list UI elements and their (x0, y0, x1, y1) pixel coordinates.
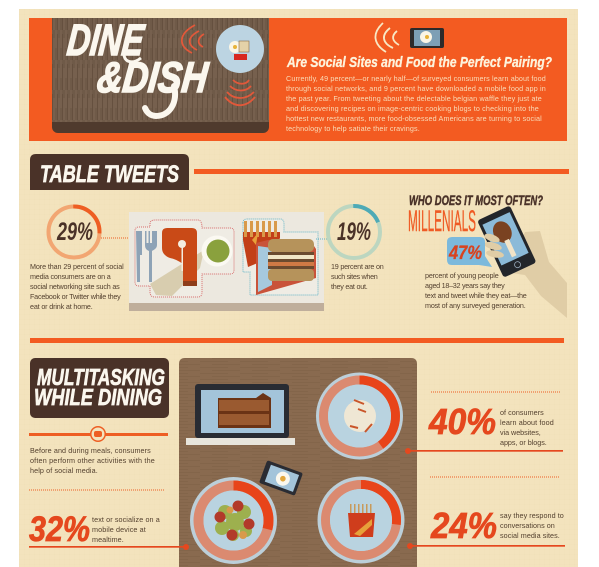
heading: Multitasking while dining: MULTITASKING (37, 364, 165, 390)
stat: 24%: social media sites. (500, 531, 560, 540)
heading: Table Tweets (30, 154, 189, 190)
stat: 32% (29, 510, 189, 550)
heading: Table Tweets: TABLE TWEETS (40, 161, 179, 188)
stat: 32%: text or socialize on a (92, 515, 160, 524)
divider with speech icon (29, 426, 168, 442)
text: before and during: Before and during meals, consumers (30, 446, 151, 455)
intro paragraph: through social networks, and 9 percent have downloaded a mobile food app in (286, 84, 546, 93)
text: 19 percent: 19 percent are on (331, 262, 384, 271)
panel: header banner (29, 16, 567, 141)
text: 19 percent (331, 262, 384, 291)
intro paragraph: and discovering recipes on image-centric cooking blogs to checking into the (286, 104, 539, 113)
phone with egg (259, 460, 303, 496)
text: young people: aged 18–32 years say they (425, 281, 505, 290)
icon: plate with egg (216, 25, 264, 73)
stat: 40%: 40% (428, 401, 496, 442)
fries (243, 221, 280, 267)
icon: phone with egg (410, 28, 444, 48)
text: young people: percent of young people (425, 271, 499, 280)
stat: 40% (405, 401, 563, 454)
text: 29 percent (30, 262, 124, 311)
title: Dine & Dish (65, 16, 211, 116)
stat: 32%: mealtime. (92, 535, 124, 544)
intro paragraph: hottest new restaurants, more food-obsessed Americans are turning to social (286, 114, 542, 123)
text: 29 percent: media consumers are on a (30, 272, 111, 281)
laptop with cake (186, 384, 295, 445)
title: Dine & Dish: &DISH (95, 54, 211, 102)
intro paragraph (286, 74, 546, 133)
stat: 24%: say they respond to (500, 511, 564, 520)
text: 29 percent: social networking site such as (30, 282, 120, 291)
panel: wooden table (179, 358, 417, 567)
heading: Multitasking while dining (30, 358, 169, 418)
salad bowl (202, 236, 232, 266)
steak (162, 228, 197, 286)
text: 19 percent: they eat out. (331, 282, 368, 291)
text: 29 percent: Facebook or Twitter while they (30, 292, 121, 301)
title: Dine & Dish: DINE (65, 16, 147, 65)
stat: 32%: mobile device at (92, 525, 146, 534)
text: 19 percent: such sites when (331, 272, 378, 281)
sandwich (256, 239, 316, 295)
stat: 40%: of consumers (500, 408, 544, 417)
intro paragraph: Currently, 49 percent—or nearly half—of surveyed consumers learn about food (286, 74, 546, 83)
stat: 29% ring: 29% (56, 218, 93, 246)
text: 29 percent: More than 29 percent of social (30, 262, 124, 271)
plate 40% (316, 372, 403, 460)
text: 29 percent: eat or drink at home. (30, 302, 93, 311)
icon: hand holding phone (477, 205, 567, 318)
knife and fork (136, 231, 157, 282)
callout bubble 47% (447, 237, 492, 267)
callout bubble 47%: 47% (448, 243, 482, 264)
stat: 40%: apps, or blogs. (500, 438, 547, 447)
text: MILLENIALS (408, 205, 476, 238)
stat: 40%: learn about food (500, 418, 554, 427)
wood sign (52, 18, 269, 133)
intro paragraph: the past year. From tweeting about the delectable belgian waffle they just ate (286, 94, 542, 103)
heading: who does it most often: WHO DOES IT MOST OFTEN? (409, 193, 543, 208)
stat: 24% (407, 505, 565, 549)
icon: signal waves red (182, 25, 255, 105)
text: young people: most of any surveyed generation. (425, 301, 526, 310)
text: young people: text and tweet while they eat—the (425, 291, 527, 300)
stat: 19% ring (328, 206, 380, 258)
stat: 19% ring: 19% (337, 218, 371, 246)
stat: 32%: 32% (29, 510, 90, 549)
intro paragraph: technology to help satiate their cravings. (286, 124, 420, 133)
text: before and during: often perform other activities with the (30, 456, 155, 465)
icon: signal waves cream (375, 23, 399, 52)
plate 24% (318, 476, 404, 564)
heading: Multitasking while dining: WHILE DINING (34, 384, 162, 410)
outline dotted (135, 220, 234, 297)
text: young people (425, 271, 527, 310)
text: before and during (30, 446, 155, 475)
stat: 24%: 24% (430, 505, 497, 546)
stat: 24%: conversations on (500, 521, 555, 530)
illustration: table with food (129, 212, 324, 311)
stat: 40%: via websites, (500, 428, 541, 437)
plate 32% (190, 477, 277, 564)
text: before and during: help of social media. (30, 466, 98, 475)
stat: 29% ring (48, 206, 100, 258)
